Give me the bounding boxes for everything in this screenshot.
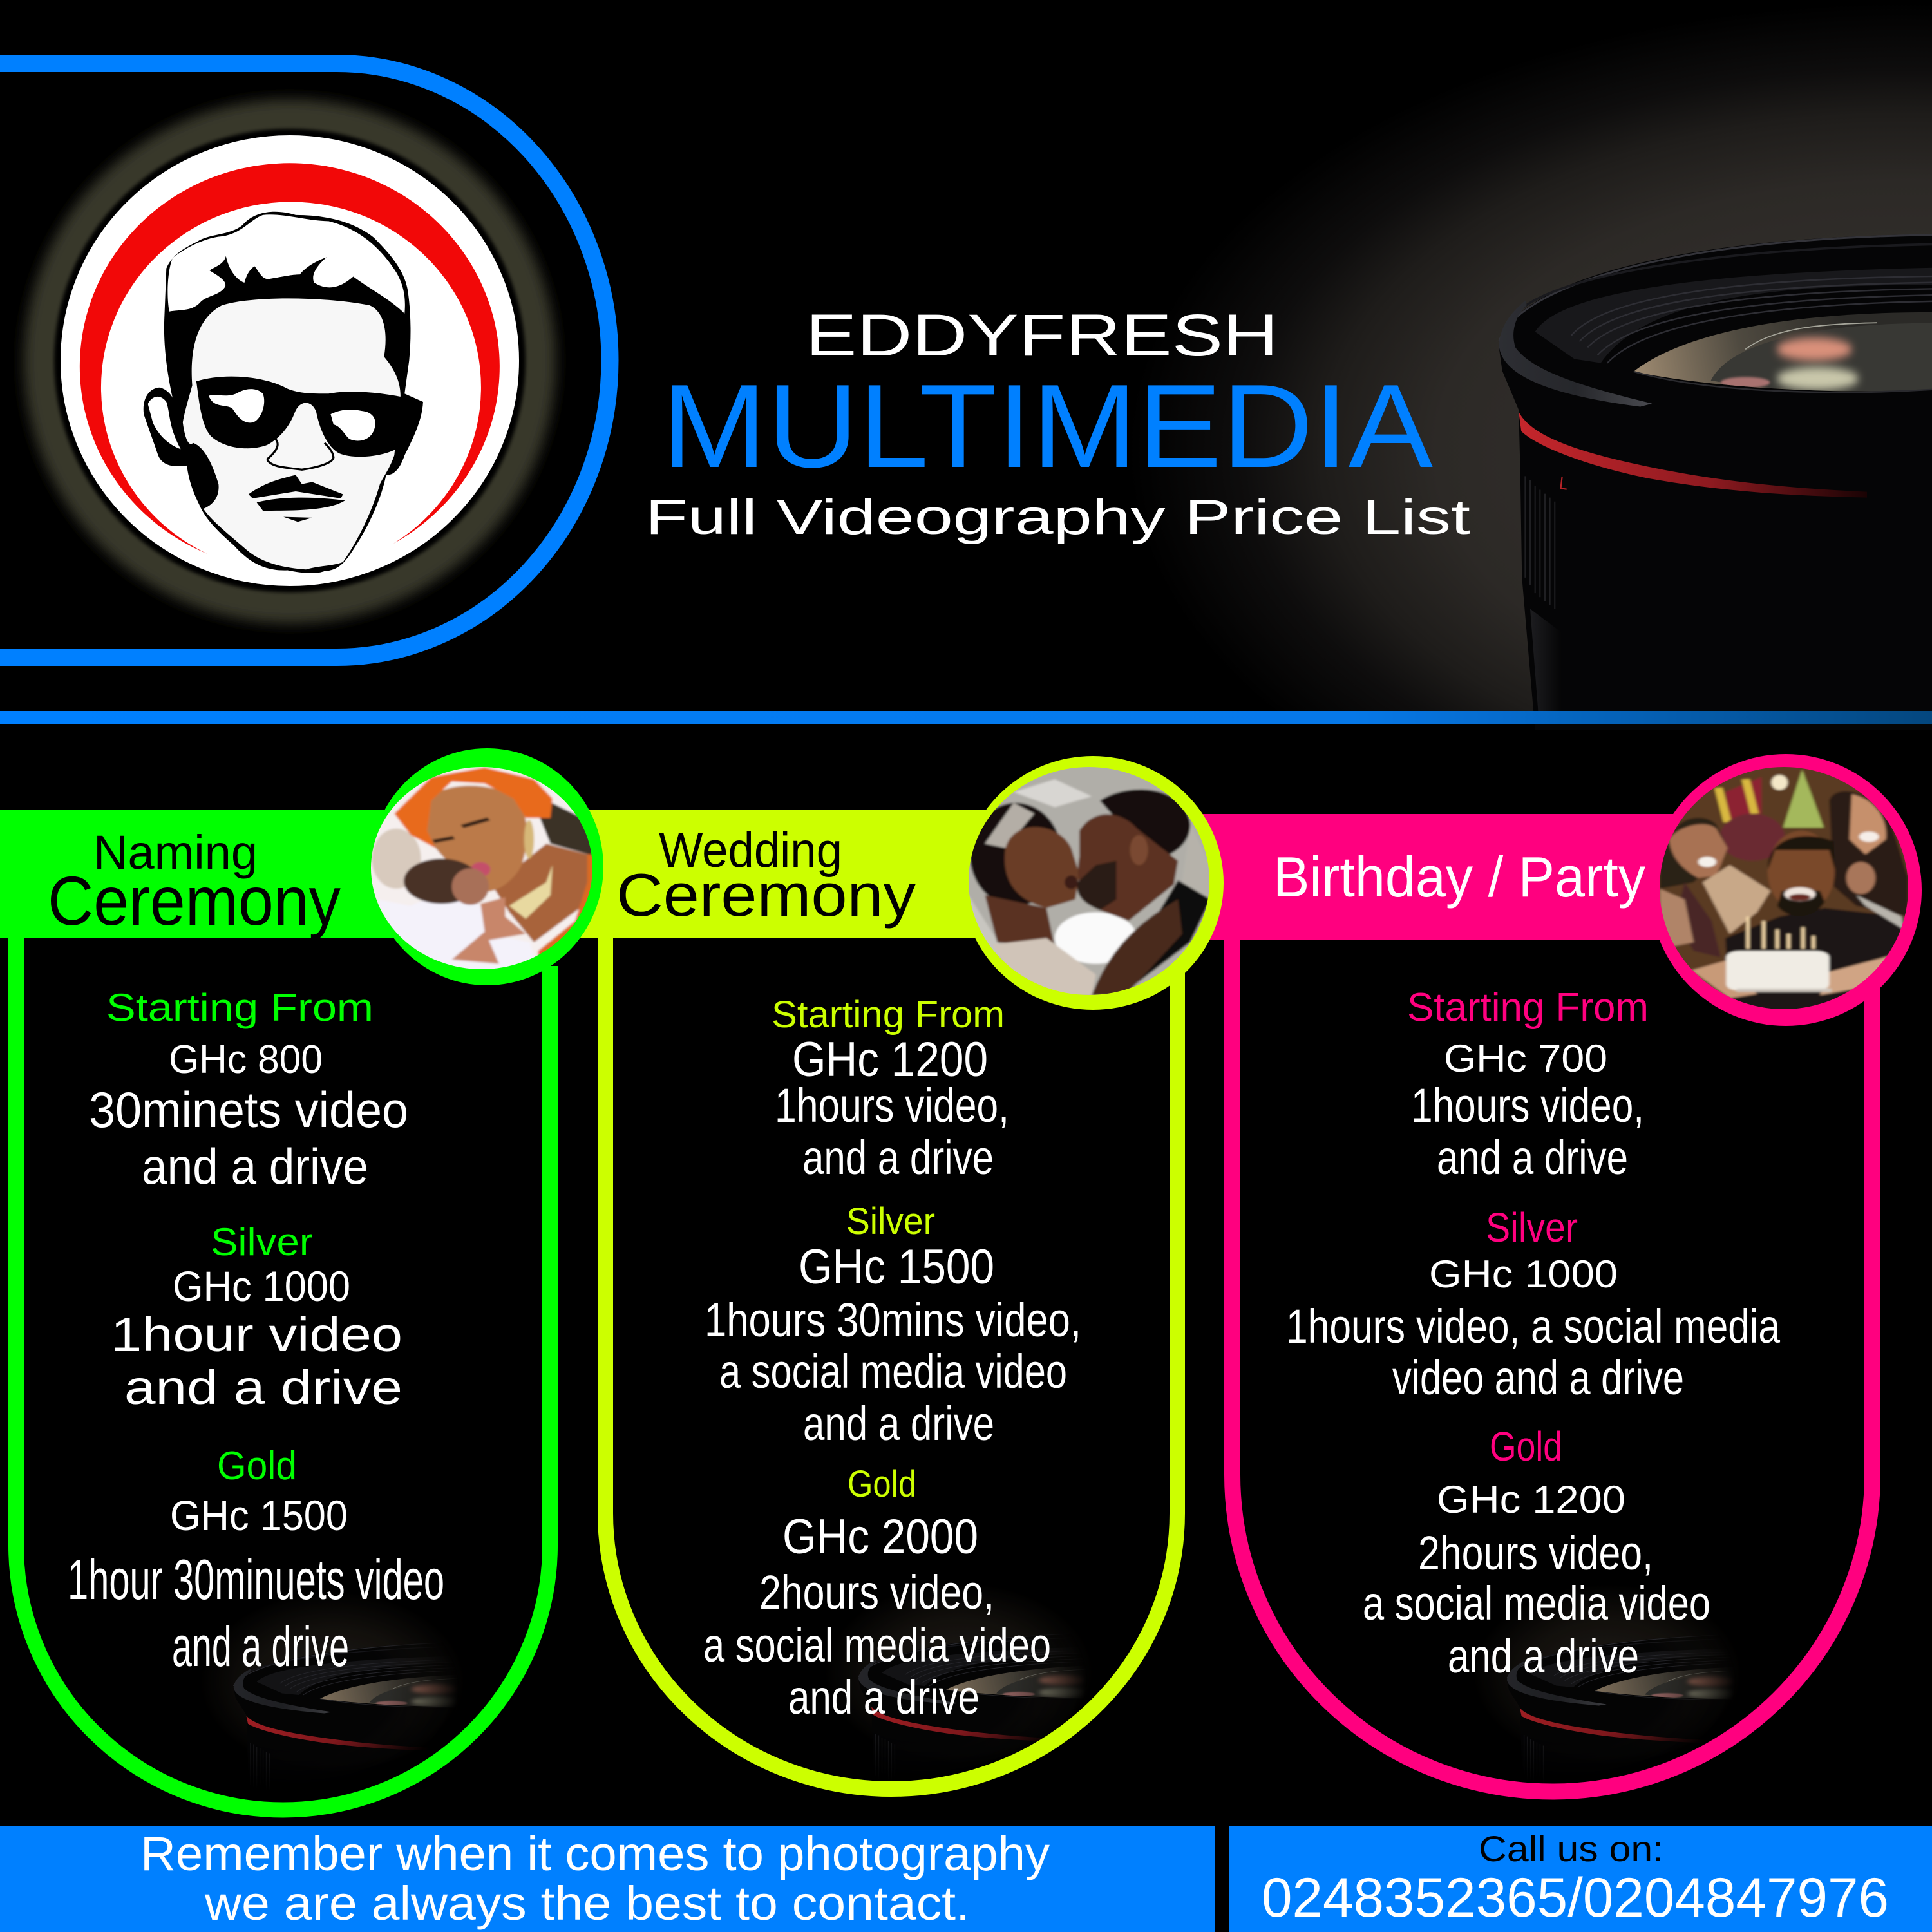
logo face drawing — [144, 212, 423, 573]
logo: caricature in circle — [24, 99, 556, 623]
phone numbers: 0248352365/0204847976 — [1262, 1867, 1889, 1929]
tier: starting from: GHc 700 — [1444, 1037, 1607, 1080]
tier: starting from: 1hours video, — [775, 1079, 1009, 1132]
tier: gold: GHc 1500 — [170, 1492, 348, 1539]
tier: gold: and a drive — [1448, 1629, 1639, 1683]
tagline text — [140, 1827, 1050, 1930]
banner title: naming: Naming — [93, 826, 258, 879]
banner title: birthday: Birthday / Party — [1273, 845, 1645, 909]
title line: MULTIMEDIA: MULTIMEDIA — [661, 359, 1433, 492]
tier: silver: 1hours 30mins video, — [705, 1293, 1081, 1347]
price list: birthday — [1286, 985, 1781, 1683]
panel: header with camera lens — [1069, 0, 1932, 730]
tier: gold: Gold — [217, 1444, 297, 1488]
logo red crescent — [80, 163, 500, 554]
logo dark gap — [54, 129, 526, 592]
tier: starting from — [89, 986, 408, 1195]
tier: gold — [703, 1463, 1051, 1724]
tier: silver: Silver — [846, 1200, 935, 1242]
tier: silver — [111, 1220, 402, 1414]
tier: starting from: Starting From — [1407, 985, 1649, 1030]
lens mark: L — [1558, 473, 1569, 494]
tier: gold: Gold — [848, 1463, 916, 1505]
watermark lens — [850, 1600, 1084, 1767]
tier: starting from: and a drive — [802, 1131, 994, 1184]
tier: gold: GHc 2000 — [782, 1510, 978, 1564]
panel: birthday / party — [1191, 754, 1922, 1842]
tier: silver: Silver — [211, 1220, 313, 1264]
tier: gold: a social media video — [703, 1618, 1051, 1672]
footer panel: tagline — [0, 1826, 1215, 1932]
tier: gold: 2hours video, — [759, 1566, 994, 1619]
banner: birthday — [1191, 814, 1707, 940]
panel: naming ceremony — [0, 748, 603, 1850]
tier: silver: a social media video — [719, 1345, 1067, 1398]
tier: silver: Silver — [1486, 1204, 1578, 1251]
footer panel: contact — [1229, 1826, 1932, 1932]
tier: silver: GHc 1500 — [799, 1240, 994, 1294]
tier: starting from: 30minets video — [89, 1081, 408, 1138]
background glow behind lens — [1069, 0, 1932, 711]
tier: silver — [1286, 1204, 1781, 1405]
tier: gold — [68, 1444, 444, 1678]
tier: gold: a social media video — [1363, 1577, 1710, 1630]
tier: silver: GHc 1000 — [173, 1262, 350, 1310]
tier: silver: GHc 1000 — [1429, 1253, 1618, 1296]
banner title: wedding — [616, 823, 916, 929]
banner title: wedding: Wedding — [659, 823, 842, 878]
outline frame: naming — [16, 938, 550, 1810]
tier: starting from — [1407, 985, 1649, 1184]
tier: silver — [705, 1200, 1081, 1450]
tier: gold: 1hour 30minuets video — [68, 1548, 444, 1611]
divider: blue horizontal bar — [0, 711, 1932, 724]
photo circle: naming — [366, 748, 603, 985]
panel: wedding ceremony — [580, 756, 1224, 1841]
tier: starting from — [772, 994, 1009, 1184]
watermark lens — [1498, 1601, 1732, 1768]
tier: starting from: GHc 1200 — [792, 1032, 988, 1087]
title block — [645, 303, 1470, 545]
tier: starting from: and a drive — [1437, 1131, 1628, 1184]
tier: starting from: Starting From — [772, 994, 1005, 1036]
tier: silver: video and a drive — [1392, 1351, 1684, 1405]
tier: gold: Gold — [1490, 1423, 1562, 1470]
tier: starting from: Starting From — [106, 986, 374, 1029]
photo circle: wedding — [962, 756, 1224, 1010]
banner title: wedding: Ceremony — [616, 861, 916, 929]
photo circle: birthday — [1650, 754, 1922, 1026]
tier: gold: GHc 1200 — [1437, 1478, 1625, 1521]
tier: silver: and a drive — [124, 1361, 402, 1414]
tier: starting from: GHc 800 — [169, 1037, 323, 1082]
photo: camera lens — [1499, 234, 1932, 730]
logo outer halo ring — [24, 99, 556, 623]
outline frame: birthday — [1233, 940, 1873, 1792]
price list: wedding — [703, 994, 1081, 1724]
outline frame: wedding — [605, 938, 1177, 1789]
tier: silver: 1hour video — [111, 1308, 402, 1361]
tier: starting from: and a drive — [142, 1138, 368, 1195]
tagline text: we are always the best to contact. — [204, 1877, 970, 1930]
logo white disc — [59, 134, 520, 587]
tier: gold: and a drive — [172, 1615, 349, 1678]
tagline text: Remember when it comes to photography — [140, 1827, 1050, 1880]
price list: naming — [68, 986, 444, 1678]
tier: gold: and a drive — [788, 1671, 980, 1724]
tier: silver: 1hours video, a social media — [1286, 1300, 1781, 1353]
tier: gold: 2hours video, — [1418, 1526, 1653, 1580]
logo frame: blue rounded outline — [0, 63, 610, 657]
banner title: naming: Ceremony — [48, 862, 341, 940]
watermark lens — [225, 1609, 456, 1776]
tier: gold — [1363, 1423, 1710, 1683]
banner: wedding — [580, 810, 1043, 938]
tier: silver: and a drive — [803, 1397, 994, 1450]
banner: naming — [0, 810, 438, 938]
tier: starting from: 1hours video, — [1411, 1079, 1644, 1132]
title line: price list: Full Videography Price List — [645, 490, 1470, 545]
title line: EDDYFRESH: EDDYFRESH — [806, 303, 1278, 368]
banner title: naming — [48, 826, 341, 940]
contact label: Call us on: — [1479, 1828, 1663, 1869]
